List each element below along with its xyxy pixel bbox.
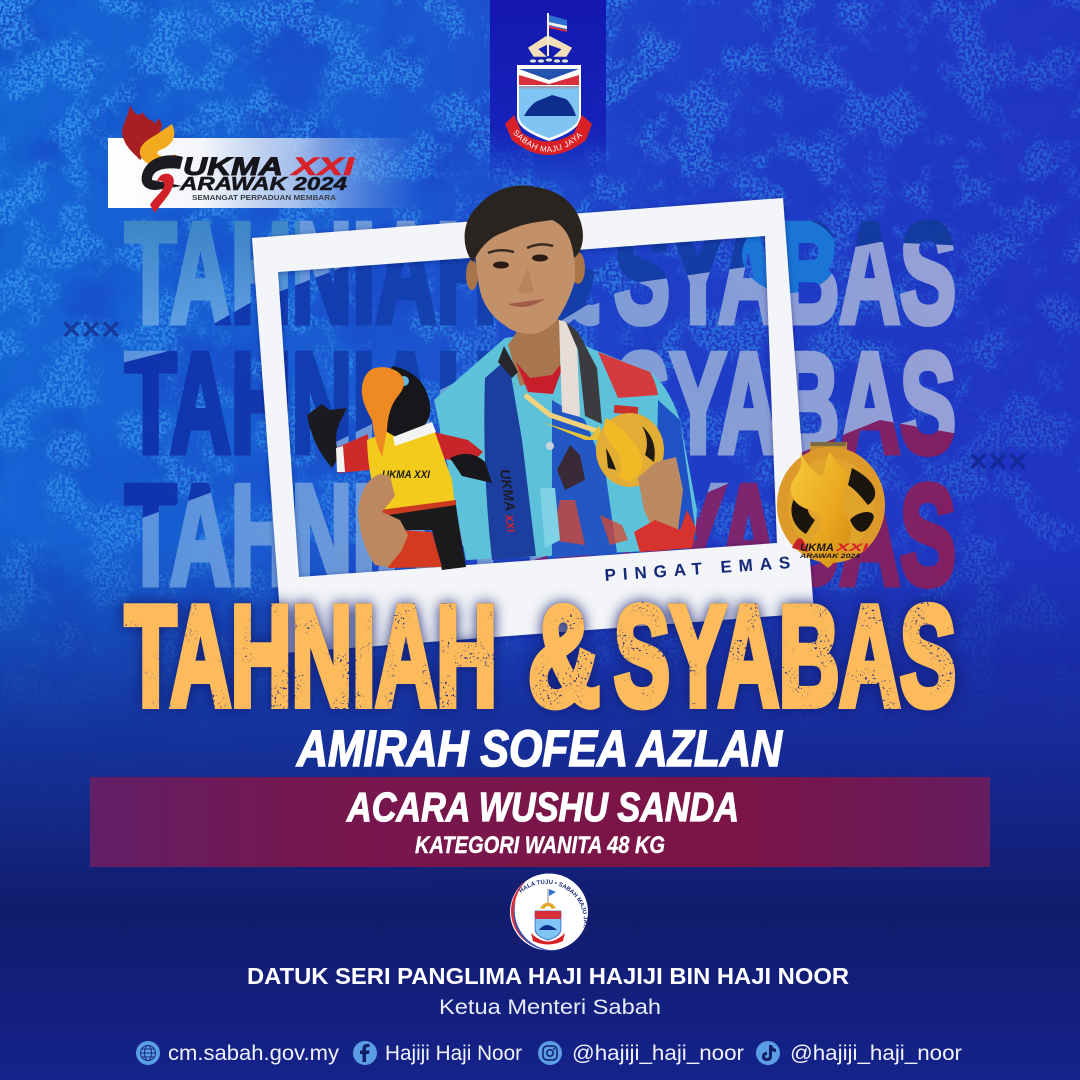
main title: TAHNIAH [125,577,497,736]
SUKMA XXI logo strip [108,105,420,213]
SUKMA XXI logo strip: UKMA [183,153,283,181]
mascot hornbill plush: UKMA XXI [382,469,431,481]
large gold medal badge: XXI [834,542,870,554]
SUKMA XXI logo strip: XXI [289,153,356,181]
large gold medal badge: ARAWAK 2024 [799,554,861,560]
chief minister name: DATUK SERI PANGLIMA HAJI HAJIJI BIN HAJI NOOR [247,963,849,989]
chief minister title: Ketua Menteri Sabah [439,996,661,1019]
panel: event band [90,777,990,867]
background repeated headline with flag wave [124,219,955,589]
mascot hornbill plush [307,366,492,570]
icon: Hala Tuju Sabah Maju Jaya seal: HALA TUJU • SABAH MAJU JAYA [518,880,588,931]
icon: tiktok [756,1041,780,1065]
panel: tilted white photo frame [252,198,814,653]
icon: facebook [353,1041,377,1065]
main title: & [528,577,600,736]
icon: instagram [538,1041,562,1065]
decorative crosses right: ××× [969,443,1027,479]
facebook name: Hajiji Haji Noor [385,1042,522,1065]
athlete hand and cuff [634,457,696,552]
large gold medal badge [777,442,885,568]
athlete torso and jersey: UKMA [497,468,519,512]
gold medal on ribbon [542,405,664,487]
athlete torso and jersey: XXI [502,513,517,534]
crest backdrop band [490,0,606,185]
decorative crosses left: ××× [62,311,120,347]
social links row [136,1041,962,1065]
icon: Hala Tuju Sabah Maju Jaya seal [510,874,588,951]
icon: globe [136,1041,160,1065]
event title: ACARA WUSHU SANDA [346,784,739,830]
photo caption: pingat emas: PINGAT EMAS [604,553,791,585]
icon: Sabah state crest: SABAH MAJU JAYA [514,130,582,152]
athlete head [465,185,585,334]
large gold medal badge: UKMA [800,542,834,554]
icon: torch flame [122,105,183,213]
SUKMA XXI logo strip: ARAWAK 2024 [179,174,347,194]
photo: athlete with mascot and gold medal [307,185,697,570]
athlete name: AMIRAH SOFEA AZLAN [295,720,783,777]
tiktok handle: @hajiji_haji_noor [790,1042,962,1065]
website: cm.sabah.gov.my [168,1042,340,1065]
SUKMA XXI logo strip: SEMANGAT PERPADUAN MEMBARA [192,193,337,202]
athlete torso and jersey [434,312,697,560]
icon: Sabah state crest [505,13,592,155]
event category: KATEGORI WANITA 48 KG [415,832,665,859]
instagram handle: @hajiji_haji_noor [572,1042,744,1065]
